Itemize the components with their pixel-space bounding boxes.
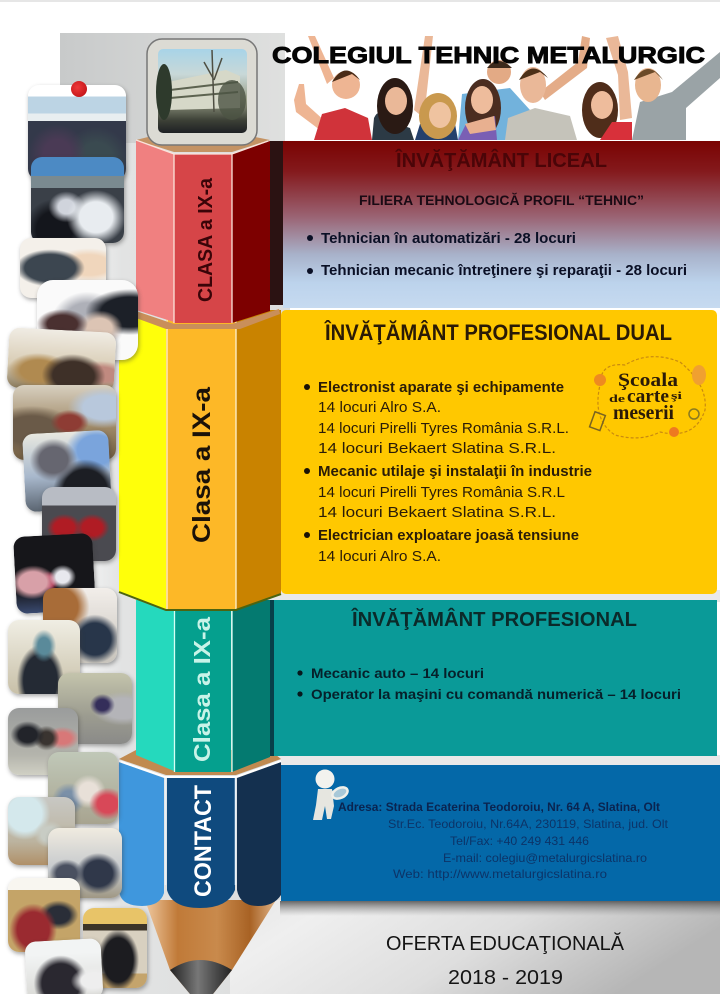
photo: lab with teacher [8, 620, 80, 694]
photo: computer lab [22, 430, 112, 512]
photo: people in red coats [42, 487, 116, 561]
photo: group of women [24, 938, 104, 994]
pencil section: red [136, 134, 283, 329]
panel: invatamant profesional: ÎNVĂŢĂMÂNT PROFESIONAL [351, 607, 637, 631]
photo: three people [8, 708, 78, 775]
title: COLEGIUL TEHNIC METALURGIC [272, 42, 705, 68]
photo: three girls [37, 280, 138, 360]
panel: invatamant profesional: Mecanic auto – 14 locuri [311, 665, 484, 681]
list: Electrician exploatare joasă tensiune [318, 528, 579, 544]
panel: contact details [280, 765, 720, 916]
photo: classroom board [8, 797, 75, 865]
photo: corridor [58, 673, 132, 744]
header photo: students [285, 33, 720, 140]
photo collage [6, 81, 150, 994]
panel: invatamant profesional: Operator la maşini cu comandă numerică – 14 locuri [311, 686, 681, 702]
list: 14 locuri Bekaert Slatina S.R.L. [318, 441, 556, 457]
footer: oferta educationala [386, 932, 624, 989]
photo: diploma holders [83, 908, 147, 988]
list: Mecanic utilaje şi instalaţii în industrie [318, 464, 592, 480]
icon: red pin [71, 81, 87, 97]
panel: contact details: Str.Ec. Teodoroiu, Nr.64A, 230119, Slatina, jud. Olt [388, 817, 669, 831]
photo: stage group [13, 533, 96, 614]
logo: Scoala de carte si meserii: meserii [613, 402, 674, 424]
panel: invatamant liceal: Tehnician mecanic întreţinere şi reparaţii - 28 locuri [321, 263, 687, 279]
panel: invatamant liceal [283, 141, 720, 308]
logo: Scoala de carte si meserii: carte [627, 386, 669, 407]
photo: room with cabinets [48, 828, 122, 898]
photo: group with frame [20, 238, 106, 298]
list: 14 locuri Alro S.A. [318, 549, 441, 565]
photo: students at desk [7, 327, 116, 393]
list [304, 380, 592, 565]
list: 14 locuri Alro S.A. [318, 400, 441, 416]
pencil tip [145, 900, 276, 994]
pencil section: contact [119, 761, 281, 908]
list: 14 locuri Pirelli Tyres România S.R.L. [318, 421, 569, 437]
panel: invatamant profesional dual: ÎNVĂŢĂMÂNT PROFESIONAL DUAL [324, 320, 672, 345]
logo: Scoala de carte si meserii [590, 357, 706, 438]
list: 14 locuri Pirelli Tyres România S.R.L [318, 485, 565, 501]
photo: crowd outdoors [31, 157, 124, 243]
list: 14 locuri Bekaert Slatina S.R.L. [318, 505, 556, 521]
panel: invatamant profesional dual [281, 310, 717, 594]
icon: figure with magnifier [313, 770, 349, 820]
panel: contact details: E-mail: colegiu@metalurgicslatina.ro [443, 851, 647, 865]
panel: invatamant liceal: Tehnician în automatizări - 28 locuri [321, 231, 576, 247]
panel: invatamant liceal: FILIERA TEHNOLOGICĂ PROFIL “TEHNIC” [359, 193, 644, 208]
photo: banner and crowd [28, 85, 126, 180]
picture frame: school building [147, 39, 257, 145]
logo: Scoala de carte si meserii: şi [671, 390, 682, 402]
panel: invatamant profesional [274, 600, 717, 756]
label: CLASA a IX-a: CLASA a IX-a [195, 177, 217, 302]
label: Clasa a IX-a: Clasa a IX-a [189, 617, 215, 762]
panel: contact details: Web: http://www.metalurgicslatina.ro [393, 867, 607, 881]
pencil section: teal [119, 600, 281, 775]
photo: workshop with men [43, 588, 117, 663]
panel: contact details: Tel/Fax: +40 249 431 446 [450, 834, 589, 848]
photo: classroom [13, 385, 116, 460]
panel: contact details: Adresa: Strada Ecaterina Teodoroiu, Nr. 64 A, Slatina, Olt [338, 800, 660, 814]
label: Clasa a IX-a: Clasa a IX-a [188, 386, 216, 543]
logo: Scoala de carte si meserii: Şcoala [618, 370, 679, 391]
label: CONTACT: CONTACT [190, 785, 217, 897]
photo: chess players [8, 878, 80, 952]
list: Electronist aparate şi echipamente [318, 380, 564, 396]
panel: invatamant liceal: ÎNVĂŢĂMÂNT LICEAL [395, 148, 607, 172]
footer: oferta educationala: OFERTA EDUCAŢIONALĂ [386, 932, 624, 955]
footer: oferta educationala: 2018 - 2019 [448, 966, 563, 989]
pencil section: yellow [119, 310, 281, 610]
photo: women standing [48, 752, 118, 824]
logo: Scoala de carte si meserii: de [609, 394, 626, 405]
